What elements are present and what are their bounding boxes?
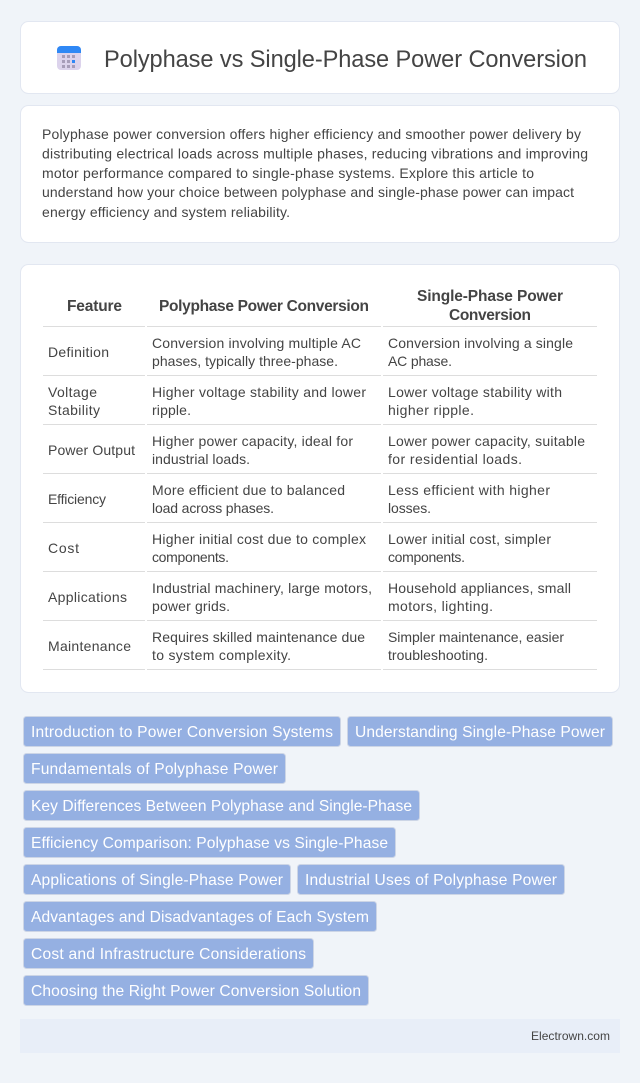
row: maintenance: troubleshooting. (388, 647, 488, 663)
row: applications (43, 571, 597, 614)
panel: intro text (20, 106, 620, 242)
row: efficiency: losses. (388, 500, 431, 516)
row: power output (43, 424, 597, 467)
row: definition: Definition (48, 344, 109, 360)
row: definition: Conversion involving multiple AC (152, 335, 361, 351)
row: maintenance: Requires skilled maintenance due (152, 629, 365, 645)
tag (24, 902, 376, 932)
row: power output: Power Output (48, 442, 135, 458)
table header: Single-Phase Power (417, 288, 563, 305)
row: applications: power grids. (152, 598, 230, 614)
tag (298, 864, 564, 894)
tag: Choosing the Right Power Conversion Solution (31, 983, 361, 1000)
tag (24, 716, 340, 746)
row: voltage stability: Lower voltage stability with (388, 384, 562, 400)
row: definition: Conversion involving a single (388, 335, 573, 351)
row: voltage stability: higher ripple. (388, 402, 474, 418)
intro paragraph: understand how your choice between polyphase and single-phase power can impact (42, 184, 574, 200)
intro paragraph (42, 126, 588, 220)
table header: Polyphase Power Conversion (159, 298, 369, 315)
row: efficiency (43, 473, 597, 516)
tag: Applications of Single-Phase Power (31, 872, 283, 889)
row: applications: Industrial machinery, large motors, (152, 580, 372, 596)
row: power output: for residential loads. (388, 451, 522, 467)
tag: Efficiency Comparison: Polyphase vs Single-Phase (31, 835, 388, 852)
row: efficiency: load across phases. (152, 500, 274, 516)
row: cost: components. (152, 549, 229, 565)
tag (24, 828, 396, 858)
tag: Industrial Uses of Polyphase Power (305, 872, 557, 889)
row: efficiency: More efficient due to balanced (152, 482, 345, 498)
row: voltage stability: ripple. (152, 402, 191, 418)
tag: Fundamentals of Polyphase Power (31, 761, 278, 778)
row: cost (43, 522, 597, 565)
row: power output: Higher power capacity, ideal for (152, 433, 353, 449)
row: applications: Household appliances, small (388, 580, 571, 596)
row: voltage stability: Voltage (48, 384, 97, 400)
tag (24, 864, 290, 894)
tag: Introduction to Power Conversion Systems (31, 724, 333, 741)
row: power output: industrial loads. (152, 451, 250, 467)
panel: topic tags (24, 716, 612, 1006)
table header: Conversion (449, 307, 531, 324)
intro paragraph: motor performance compared to single-phase systems. Explore this article to (42, 165, 534, 181)
row: definition: AC phase. (388, 353, 452, 369)
table header (67, 288, 563, 324)
table header: Feature (67, 298, 122, 315)
tag (24, 754, 286, 784)
intro paragraph: Polyphase power conversion offers higher efficiency and smoother power delivery by (42, 126, 581, 142)
row: applications: motors, lighting. (388, 598, 493, 614)
header panel (20, 22, 620, 94)
panel: comparison table (20, 264, 620, 692)
row: definition (43, 326, 597, 369)
title: Polyphase vs Single-Phase Power Conversion (104, 47, 587, 73)
intro paragraph: distributing electrical loads across multiple phases, reducing vibrations and improving (42, 146, 588, 162)
row: cost: Higher initial cost due to complex (152, 531, 366, 547)
tag (348, 716, 612, 746)
row: maintenance: Simpler maintenance, easier (388, 629, 564, 645)
row: cost: components. (388, 549, 465, 565)
row: maintenance: Maintenance (48, 638, 131, 654)
tag (24, 938, 314, 968)
row: voltage stability (43, 375, 597, 418)
icon: calendar grid (57, 46, 81, 70)
row: cost: Cost (48, 540, 79, 556)
row: cost: Lower initial cost, simpler (388, 531, 551, 547)
tag: Cost and Infrastructure Considerations (31, 946, 306, 963)
row: power output: Lower power capacity, suitable (388, 433, 585, 449)
row: maintenance: to system complexity. (152, 647, 291, 663)
footer (20, 1019, 620, 1053)
footer: Electrown.com (531, 1029, 610, 1043)
row: efficiency: Less efficient with higher (388, 482, 550, 498)
intro paragraph: energy efficiency and system reliability. (42, 204, 290, 220)
row: maintenance (43, 620, 597, 670)
tag (24, 790, 420, 820)
row: voltage stability: Stability (48, 402, 100, 418)
row: voltage stability: Higher voltage stability and lower (152, 384, 366, 400)
row: applications: Applications (48, 589, 127, 605)
tag: Advantages and Disadvantages of Each System (31, 909, 369, 926)
tag: Understanding Single-Phase Power (355, 724, 605, 741)
tag: Key Differences Between Polyphase and Single-Phase (31, 798, 412, 815)
row: efficiency: Efficiency (48, 491, 106, 507)
tag (24, 976, 368, 1006)
row: definition: phases, typically three-phase. (152, 353, 338, 369)
